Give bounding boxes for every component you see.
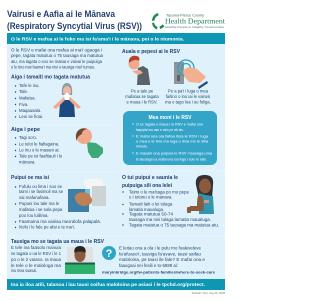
logo: health department: Tacoma-Pierce County [166, 14, 204, 18]
divider [8, 125, 225, 236]
section: caring for someone with RSV: se tagata o ua le RSV i le 1 [11, 251, 62, 256]
section: infants symptoms: Le teloi le fiafiagaina. [19, 142, 59, 146]
intro text: O le RSV e mafai ona mafua ai ma'i ogaoga i [11, 48, 102, 52]
section: protect yourself and others: Nofo i le fale pe afai e te ma'i. [19, 224, 75, 230]
section: best protection: Taimi o le ma'itaga po mo pepe [129, 189, 190, 194]
captions: spread [125, 88, 211, 104]
captions: spread: e maua i le RSV. [126, 100, 158, 104]
captions: spread: Pe a tale pe [131, 88, 154, 93]
text: when to seek care: E leitau ona a ola i le pulu mo foaleveleve [119, 245, 202, 250]
logo: health department: Health Department [165, 16, 226, 26]
section: best protection: O tui puipui e saunia le [122, 175, 178, 181]
section: older adults symptoms: Tafe le isu. [19, 83, 40, 88]
section: infants symptoms: Le inu o le masani ai. [19, 148, 60, 153]
section: older adults symptoms: Maqausala. [19, 108, 41, 113]
section: protect yourself and others: Puipui oe ma isi [11, 175, 49, 181]
captions: spread: faitino o loo iai le vairusi [166, 94, 210, 99]
logo: health department: Healthy People in Healthy Communities [165, 25, 225, 29]
section: best protection: tausaga ma nisi tulaga lamatia maualuga. [129, 217, 211, 222]
section: infants symptoms [11, 127, 63, 164]
section: infants symptoms: Aiga i pepe [11, 127, 40, 133]
intro text: o le tino mai faama'i ma nisi o-tausiga ma'i tumau. [11, 64, 95, 70]
callout: facts: minute. [136, 144, 148, 148]
section: caring for someone with RSV: le tele o le malologa ma [11, 263, 62, 268]
section: infants symptoms: mānava. [19, 160, 35, 164]
section: protect yourself and others: Faamama ma vaiéau mea'alofa palapalā. [19, 219, 101, 224]
captions: spread: mafatua se tagata [125, 94, 159, 99]
panel: background [7, 33, 225, 290]
section: older adults symptoms: Mafatua. [19, 96, 36, 100]
callout: facts [123, 111, 217, 165]
callout: facts: faapipisi mo aso e valu pe sili atu. [136, 127, 184, 132]
callout: facts: Mea moni i le RSV [148, 115, 192, 121]
icon: question mark [102, 246, 116, 260]
section: older adults symptoms: Leoi se fioai. [19, 114, 43, 119]
section: best protection: lamatia maualuga. [129, 207, 164, 212]
section: protect yourself and others: poo lou lulilima. [19, 213, 49, 218]
callout: facts: E mafai ona ola faitau itula le RSV i luga [136, 133, 209, 138]
section: caring for someone with RSV: Tausiga mo se tagata ua maua i le RSV [11, 239, 104, 245]
icon: hand washing [68, 178, 106, 212]
title [7, 9, 142, 31]
section: best protection [122, 175, 219, 228]
icon: sneezing woman [53, 83, 81, 117]
section: protect yourself and others [11, 175, 101, 230]
section: caring for someone with RSV: inu mea suavai. [11, 268, 37, 273]
section: infants symptoms: Tale pe ioi faafitauli i le [19, 154, 63, 158]
section: best protection: Tagata matutua o 75 tausaga ma matutua atu. [129, 222, 219, 228]
captions: spread: ma o tago loa i ou foliga. [165, 100, 211, 104]
captions: spread: Pe a pa'i i luga o mea [168, 88, 209, 93]
title: Vairusi e Aafia ai le Mānava [7, 9, 116, 19]
section: protect yourself and others: mafatua i se sola pepa [19, 207, 63, 212]
section: protect yourself and others: vai mafanafana. [19, 195, 50, 200]
icon: person with bandage [187, 175, 214, 214]
section: protect yourself and others: Pupuni lou tale ma le [19, 201, 60, 206]
footer band: Ina ia iloa atili, talanoa i lau tausi soifua maloloina pe asiasi i le tpchd.org/protect. [11, 282, 205, 288]
section: how RSV spreads: Auala e pepesi ai le RSV [122, 49, 180, 55]
callout: facts: o mea e le tino ma luga o lima mo le silia [136, 138, 209, 144]
revision note: Sioloalii I Nov, Aug 26, 2025 [192, 291, 225, 295]
text: when to seek care [102, 245, 215, 274]
text: when to seek care: fa'afuaso'i, tausiga fa'avave, tausi saifao [119, 251, 202, 256]
title: (Respiratory Syncytial Virus (RSV)) [7, 21, 142, 31]
header band [7, 33, 225, 44]
intro text: atu, ma tagata o soo se matua e vaivai le puipuiga [11, 59, 103, 64]
footer band [7, 279, 225, 290]
icon: hand touching door [174, 60, 208, 89]
section: protect yourself and others: Fufulu ou lima i soo se [19, 184, 63, 189]
callout: facts: le tausiaga ua mafai ona lua fuga i sofo le tulei. [136, 156, 207, 161]
intro text: pepe, tagata matutua o 75 tausaga ma matutua [11, 53, 104, 58]
section: older adults symptoms [11, 74, 91, 119]
section: best protection: o i totonu o le manava. [129, 194, 172, 200]
icon: person in bed [65, 246, 95, 274]
callout: facts: E masani ona puipuia le RSV i tausaga uma [136, 150, 213, 155]
text: when to seek care: maryinbridge.org/tw-patients-families/where-to-seek-care [102, 270, 215, 274]
intro text [11, 48, 104, 70]
section: older adults symptoms: Aiga i tamaiti mo tagata matutua [11, 74, 91, 80]
icon: coughing man [128, 56, 150, 85]
section: infants symptoms: Tagi so'o. [19, 135, 37, 140]
section: best protection: puipuiga sili ona lelei [122, 183, 172, 189]
header band: O le RSV e mafua ai le fuko ma isi fa'ama'i i le mānava, pei o le niumonia. [11, 36, 184, 41]
icon: baby [76, 128, 103, 158]
section: caring for someone with RSV: po o le 2 vaiaso. Ia maua [11, 257, 62, 262]
section: older adults symptoms: Tale. [19, 89, 28, 94]
logo: health department [152, 13, 226, 30]
section: best protection: Tagata matutua 50-74 [129, 212, 174, 216]
section: caring for someone with RSV [11, 239, 104, 273]
section: older adults symptoms: Fiva. [19, 102, 28, 107]
section: caring for someone with RSV: E tele ina faasolo manuia [11, 245, 62, 250]
callout: facts: O se tagata e maua i le RSV e mafai ona [136, 121, 204, 126]
icon: question mark: ? [106, 248, 113, 260]
text: when to seek care: maloloina, pe tausi ile fale? E mafai ona e [119, 257, 206, 262]
text: when to seek care: faaogoai nei fesili e to-5889 ai: [119, 263, 178, 268]
section: protect yourself and others: taimi i se fasimoli ma se [19, 189, 64, 194]
section: best protection: Tamaiti laiti o lei tulaga [129, 202, 173, 206]
